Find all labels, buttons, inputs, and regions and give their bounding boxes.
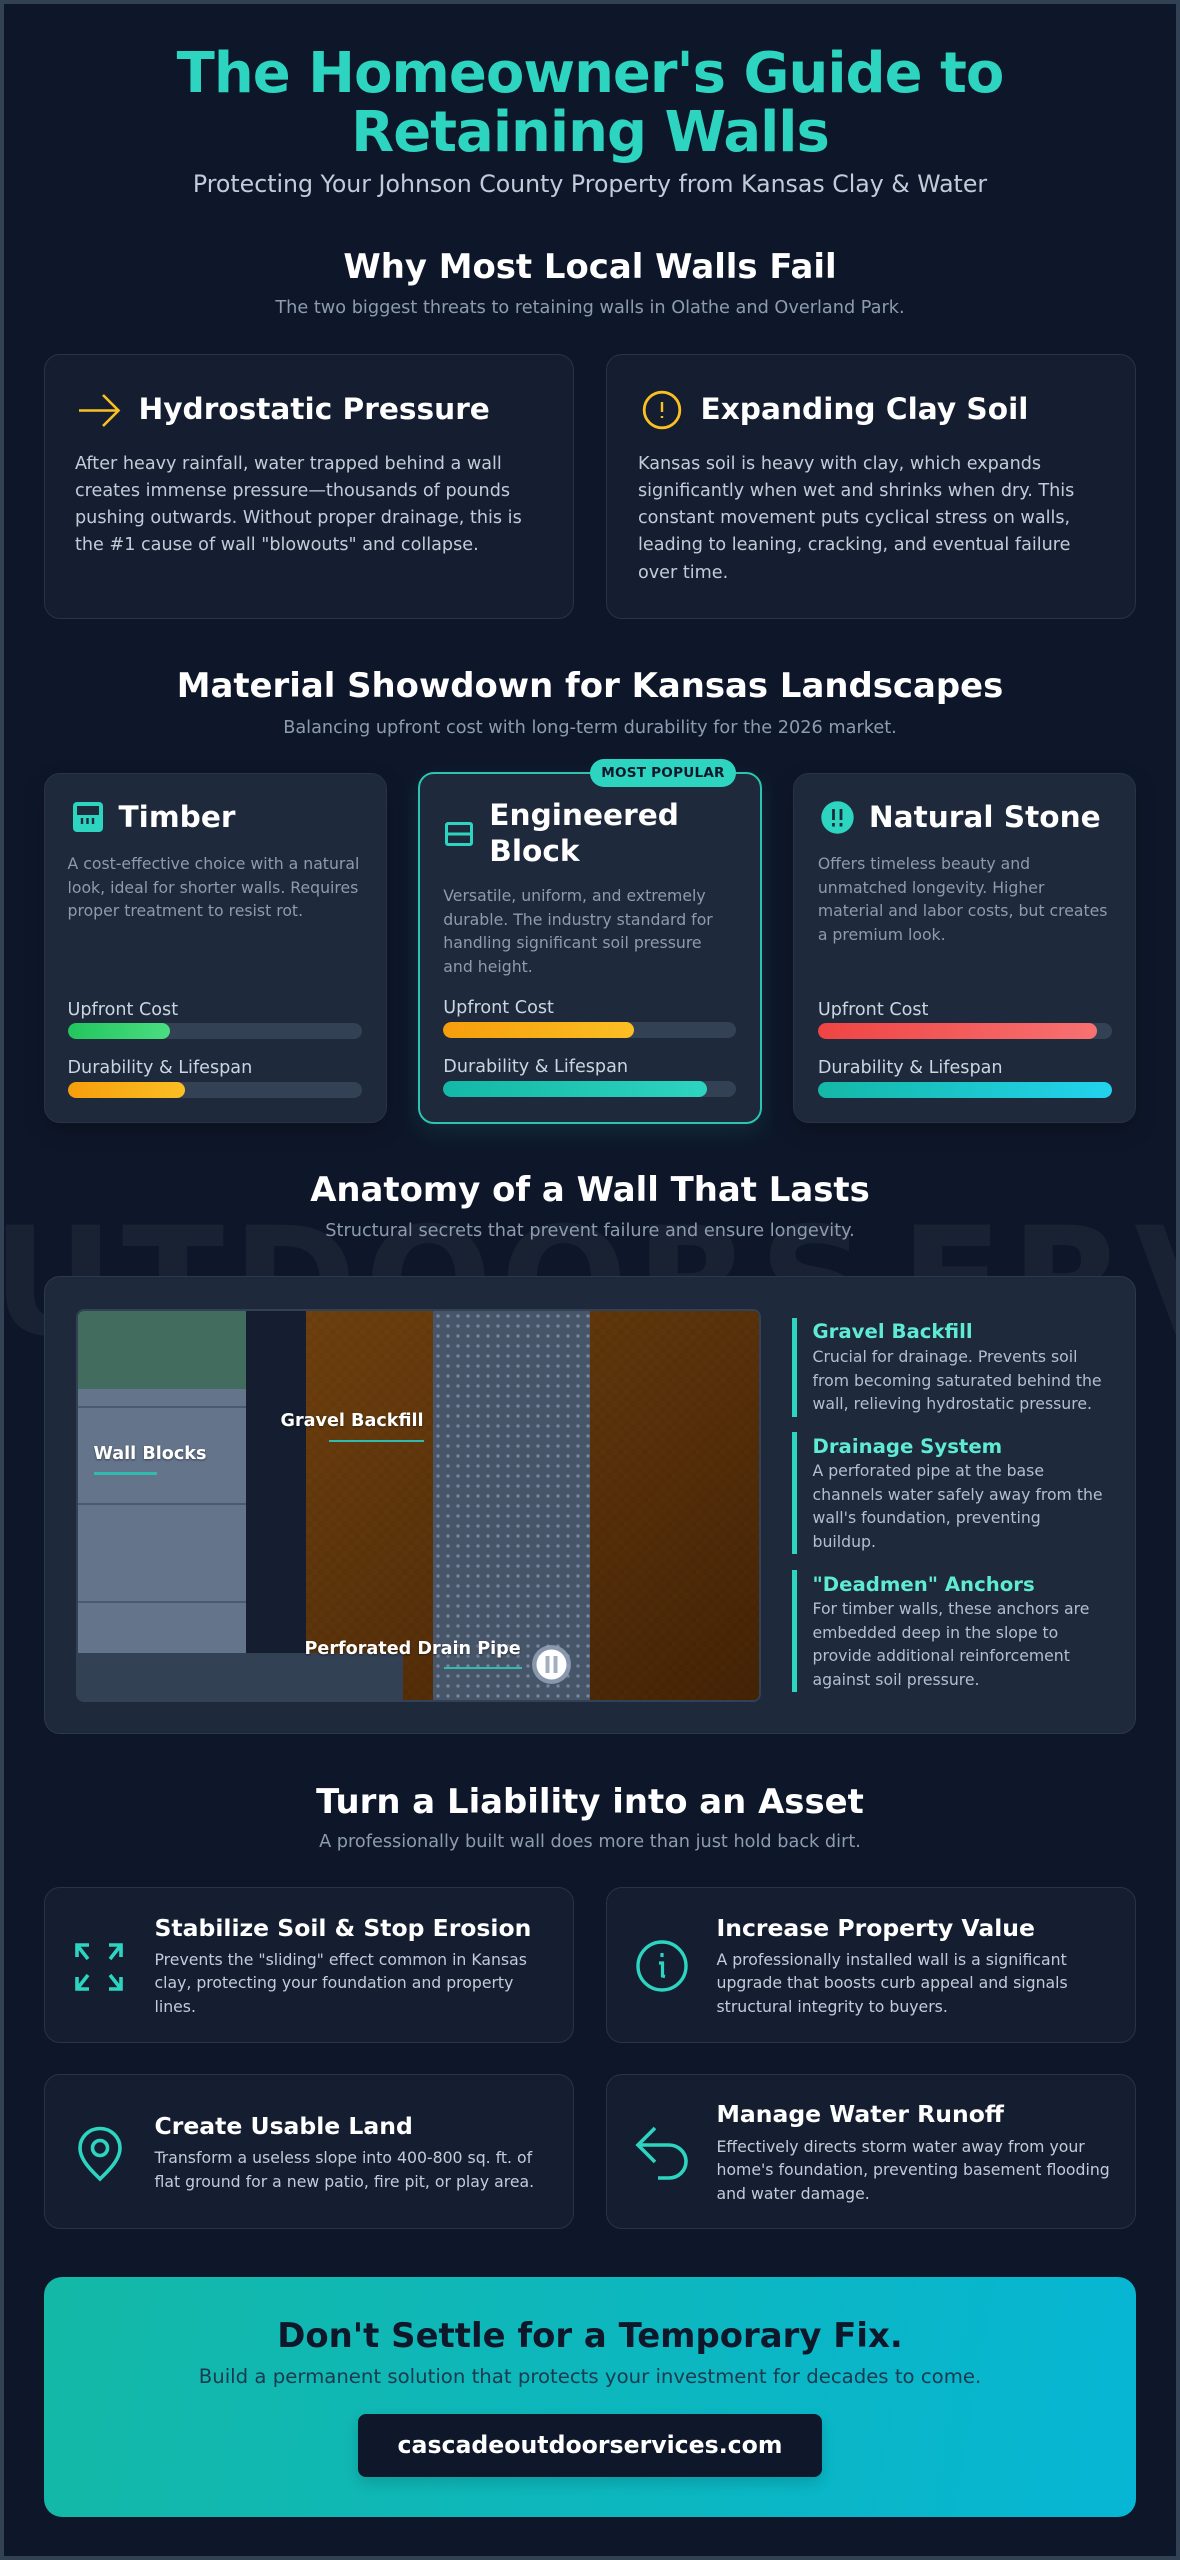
benefit text: A professionally installed wall is a significant [716,1950,1067,1968]
underline: drain pipe [444,1666,522,1669]
icon: arrow [79,394,120,427]
title [176,41,1003,165]
item text: For timber walls, these anchors are [812,1599,1089,1618]
icon: stone [821,801,854,834]
list item: drainage system [792,1432,1103,1554]
bar: stone durability [818,1082,1112,1098]
section subtitle: threats: The two biggest threats to retaining walls in Olathe and Overland Park. [275,298,905,318]
benefit title: Manage Water Runoff [716,2100,1004,2128]
description: engineered block: handling significant soil pressure [443,933,702,952]
panel: usable land [44,2074,574,2229]
item text: channels water safely away from the [812,1485,1103,1504]
heading: hydrostatic pressure: Hydrostatic Pressure [138,392,490,426]
heading: engineered block [489,798,679,868]
description: natural stone: unmatched longevity. Higher [818,878,1044,897]
underline: gravel backfill [329,1440,424,1442]
underline: wall blocks [94,1472,156,1474]
CTA heading: Don't Settle for a Temporary Fix. [277,2316,903,2354]
body text: clay soil: Kansas soil is heavy with clay, which expands [638,454,1041,474]
panel: timber [44,773,387,1123]
benefit text [154,1950,527,2016]
item text [812,1599,1089,1689]
benefit title: Increase Property Value [716,1914,1035,1942]
benefit text: Transform a useless slope into 400-800 sq. ft. of [154,2148,532,2167]
item text [812,1347,1102,1413]
label: gravel backfill: Gravel Backfill [280,1411,424,1431]
bar: stone cost [818,1022,1112,1038]
description: timber [68,854,359,920]
item text: provide additional reinforcement [812,1646,1070,1665]
heading: natural stone: Natural Stone [869,800,1101,834]
heading: liability to asset: Turn a Liability into an Asset [316,1782,864,1820]
benefit title: Create Usable Land [154,2112,413,2140]
body text: hydrostatic pressure [75,454,522,555]
bar: block cost [443,1022,736,1038]
item text: Crucial for drainage. Prevents soil [812,1347,1077,1366]
benefit text [154,2148,534,2191]
section subtitle: asset: A professionally built wall does more than just hold back dirt. [319,1832,861,1852]
wall blocks [78,1388,246,1652]
panel: anatomy [44,1276,1136,1734]
description: timber: proper treatment to resist rot. [68,901,303,920]
item text: against soil pressure. [812,1670,980,1689]
grass layer [78,1310,246,1388]
CTA text: Build a permanent solution that protects your investment for decades to come. [199,2365,981,2388]
metric: upfront cost: Upfront Cost [818,1000,928,1020]
description: natural stone: a premium look. [818,925,946,944]
body text: clay soil [638,454,1074,583]
benefit title: Stabilize Soil & Stop Erosion [154,1914,531,1942]
panel: expanding clay soil [606,354,1136,619]
benefit text: clay, protecting your foundation and property [154,1973,513,1992]
body text: clay soil: over time. [638,563,728,583]
accent bar [792,1570,796,1692]
gravel layer [433,1310,590,1702]
benefit text: Effectively directs storm water away from your [716,2136,1085,2156]
soil layer [306,1310,761,1702]
icon: alert circle [642,390,682,430]
item text: buildup. [812,1532,876,1551]
panel: engineered block [418,772,762,1124]
description: natural stone: Offers timeless beauty and [818,854,1030,873]
section subtitle: materials: Balancing upfront cost with long-term durability for the 2026 market. [283,718,897,738]
benefit text: home's foundation, preventing basement flooding [716,2160,1110,2179]
panel: call to action [44,2277,1136,2517]
footing [78,1652,403,1702]
benefit text: upgrade that boosts curb appeal and signals [716,1973,1068,1992]
body text: hydrostatic pressure: After heavy rainfall, water trapped behind a wall [75,454,502,474]
icon: return arrow [636,2126,688,2180]
label: wall blocks: Wall Blocks [94,1444,206,1464]
list item: gravel backfill [792,1318,1102,1417]
panel: water runoff [606,2074,1136,2229]
benefit text: and water damage. [716,2184,870,2203]
body text: hydrostatic pressure: pushing outwards. Without proper drainage, this is [75,508,522,528]
description: natural stone [818,854,1107,944]
icon: block [445,822,473,846]
item text: wall's foundation, preventing [812,1508,1041,1527]
metric: durability: Durability & Lifespan [68,1058,252,1078]
description: natural stone: material and labor costs, but creates [818,901,1107,920]
list item: deadmen anchors [792,1570,1089,1692]
accent bar [792,1432,796,1554]
heading: expanding clay soil: Expanding Clay Soil [700,392,1028,426]
body text: clay soil: leading to leaning, cracking, and eventual failure [638,535,1070,555]
item text [812,1461,1103,1551]
metric: durability: Durability & Lifespan [818,1058,1003,1078]
CTA button [358,2414,822,2477]
benefit text: flat ground for a new patio, fire pit, or play area. [154,2172,534,2191]
accent bar [792,1318,796,1417]
item title: Drainage System [812,1434,1002,1458]
icon: expand arrows [75,1943,123,1991]
item text: A perforated pipe at the base [812,1461,1044,1480]
heading: material showdown: Material Showdown for Kansas Landscapes [177,666,1003,705]
subtitle: Protecting Your Johnson County Property from Kansas Clay & Water [193,170,987,198]
heading: timber: Timber [118,800,236,834]
bar: timber cost [68,1022,362,1038]
diagram: wall cross-section [76,1308,761,1702]
item title: "Deadmen" Anchors [812,1572,1035,1596]
metric: upfront cost: Upfront Cost [68,1000,178,1020]
description: timber: A cost-effective choice with a natural [68,854,359,873]
badge: most popular: MOST POPULAR [601,765,725,781]
benefit text [716,2136,1110,2203]
section subtitle: anatomy: Structural secrets that prevent failure and ensure longevity. [325,1221,855,1241]
description: engineered block [443,886,713,976]
bar: block durability [443,1080,736,1096]
icon: info circle [636,1940,688,1992]
benefit text: lines. [154,1997,196,2016]
icon: timber [73,802,103,832]
item text: wall, relieving hydrostatic pressure. [812,1394,1092,1413]
CTA button: cascadeoutdoorservices.com [398,2431,782,2459]
heading: why walls fail: Why Most Local Walls Fail [343,247,837,286]
title: Retaining Walls [351,100,829,165]
heading: engineered block: Block [489,834,580,868]
badge: most popular [590,759,736,787]
description: timber: look, ideal for shorter walls. Requires [68,878,358,897]
item text: embedded deep in the slope to [812,1623,1058,1642]
body text: hydrostatic pressure: creates immense pressure—thousands of pounds [75,481,510,501]
panel: stabilize soil [44,1887,574,2043]
icon: map pin [78,2126,122,2182]
description: engineered block: and height. [443,957,533,976]
label: drain pipe: Perforated Drain Pipe [304,1639,521,1659]
title: The Homeowner's Guide to [177,41,1003,106]
body text: clay soil: significantly when wet and shrinks when dry. This [638,481,1074,501]
benefit text [716,1950,1068,2016]
heading: anatomy: Anatomy of a Wall That Lasts [310,1170,870,1208]
bar: timber durability [68,1082,362,1098]
panel: hydrostatic pressure [44,354,574,619]
body text: hydrostatic pressure: the #1 cause of wall "blowouts" and collapse. [75,535,479,555]
metric: upfront cost: Upfront Cost [443,998,554,1018]
panel: property value [606,1887,1136,2043]
item text: from becoming saturated behind the [812,1371,1102,1390]
benefit text: Prevents the "sliding" effect common in Kansas [154,1950,527,1968]
item title: Gravel Backfill [812,1320,973,1343]
heading: engineered block: Engineered [489,798,679,832]
description: engineered block: durable. The industry standard for [443,910,713,929]
metric: durability: Durability & Lifespan [443,1057,628,1077]
icon: pause button [532,1645,571,1684]
benefit text: structural integrity to buyers. [716,1997,948,2016]
description: engineered block: Versatile, uniform, and extremely [443,886,706,905]
body text: clay soil: constant movement puts cyclical stress on walls, [638,508,1070,528]
panel: natural stone [793,773,1136,1123]
